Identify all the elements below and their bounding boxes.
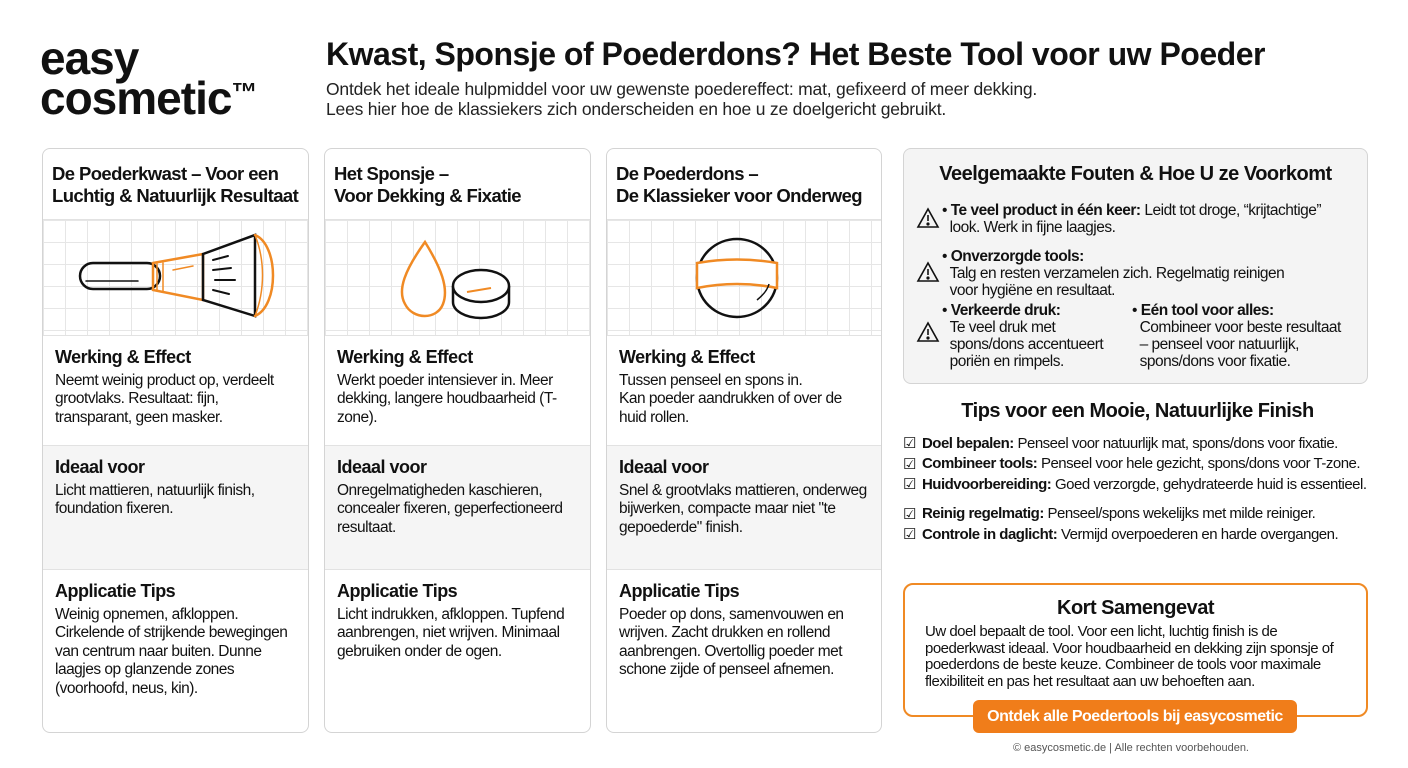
logo: easy — [40, 32, 138, 84]
panel: poederdons — [606, 148, 882, 733]
section: ideaal: Ideaal voor — [337, 457, 427, 477]
section: werking: Werking & Effect — [55, 347, 191, 367]
section: tips: Licht indrukken, afkloppen. Tupfend aanbrengen, niet wrijven. Minimaal gebruiken onder de ogen. — [337, 606, 564, 660]
icon: sponge — [325, 219, 590, 336]
section: tips: Applicatie Tips — [55, 581, 175, 601]
panel: samenvatting — [903, 583, 1368, 717]
tips list: ☑ — [903, 506, 916, 523]
tips list: ☑ — [903, 435, 916, 452]
item 1 — [942, 202, 1321, 236]
icon: warning 2 — [916, 262, 940, 282]
section: werking: Werkt poeder intensiever in. Meer dekking, langere houdbaarheid (T-zone). — [337, 372, 557, 426]
logo: cosmetic™ — [40, 72, 256, 124]
section: ideaal: Onregelmatigheden kaschieren, concealer fixeren, geperfectioneerd resultaat. — [337, 482, 562, 536]
section: tips: Applicatie Tips — [619, 581, 739, 601]
heading: De Poederkwast – Voor een Luchtig & Natuurlijk Resultaat — [52, 163, 298, 206]
section: tips: Poeder op dons, samenvouwen en wrijven. Zacht drukken en rollend aanbrengen. Overtollig poeder met schone zijde of penseel afnemen. — [619, 606, 844, 678]
item 4: spons/dons voor fixatie. — [1140, 353, 1290, 370]
panel: fouten — [903, 148, 1368, 384]
section: ideaal — [607, 446, 881, 570]
item 3 — [942, 302, 1104, 370]
item 1: • Te veel product in één keer: Leidt tot droge, “krijtachtige” — [942, 202, 1321, 219]
text: Uw doel bepaalt de tool. Voor een licht, luchtig finish is de poederkwast ideaal. Voor houdbaarheid en dekking zijn sponsje of poederdons de beste keuze. Combineer de tools voor maximale flexibiliteit en pas het resultaat aan uw behoeften aan. — [925, 623, 1333, 690]
heading: Tips voor een Mooie, Natuurlijke Finish — [961, 400, 1314, 422]
section: tips — [337, 581, 564, 660]
heading: Het Sponsje – — [334, 163, 449, 184]
subtitle: Ontdek het ideale hulpmiddel voor uw gewenste poedereffect: mat, gefixeerd of meer dekking. — [326, 79, 1037, 99]
icon: warning 3 — [916, 322, 940, 342]
heading: Kort Samengevat — [1057, 597, 1214, 619]
heading: Voor Dekking & Fixatie — [334, 185, 521, 206]
section: werking: Werking & Effect — [619, 347, 755, 367]
heading — [616, 163, 862, 206]
heading: De Poederdons – — [616, 163, 758, 184]
tips list: Huidvoorbereiding: Goed verzorgde, gehydrateerde huid is essentieel. — [922, 476, 1367, 493]
item 4 — [1132, 302, 1342, 370]
section: werking: Werking & Effect — [337, 347, 473, 367]
tips list: Doel bepalen: Penseel voor natuurlijk mat, spons/dons voor fixatie. — [922, 435, 1338, 452]
item 4: – penseel voor natuurlijk, — [1140, 336, 1299, 353]
item 3: • Verkeerde druk: — [942, 302, 1060, 319]
item 1: look. Werk in fijne laagjes. — [950, 219, 1115, 236]
tips list: ☑ — [903, 476, 916, 493]
item 3: poriën en rimpels. — [950, 353, 1064, 370]
heading: Veelgemaakte Fouten & Hoe U ze Voorkomt — [939, 163, 1332, 185]
section: ideaal: Ideaal voor — [55, 457, 145, 477]
item 2: Talg en resten verzamelen zich. Regelmatig reinigen — [950, 265, 1284, 282]
tips list: ☑ — [903, 456, 916, 473]
section: ideaal: Snel & grootvlaks mattieren, onderweg bijwerken, compacte maar niet "te gepoederde" finish. — [619, 482, 867, 536]
subtitle: Lees hier hoe de klassiekers zich onderscheiden en hoe u ze doelgericht gebruikt. — [326, 99, 946, 119]
section: werking — [607, 336, 881, 446]
icon: warning 1 — [916, 208, 940, 228]
section: ideaal: Licht mattieren, natuurlijk finish, foundation fixeren. — [55, 482, 255, 517]
section: ideaal — [325, 446, 590, 570]
section: werking: Tussen penseel en spons in. — [619, 372, 802, 388]
heading — [334, 163, 521, 206]
section: tips: Applicatie Tips — [337, 581, 457, 601]
icon: puff — [607, 219, 881, 336]
section: werking — [43, 336, 308, 446]
tips list: Controle in daglicht: Vermijd overpoederen en harde overgangen. — [922, 526, 1338, 543]
item 4: • Eén tool voor alles: — [1132, 302, 1274, 319]
item 3: Te veel druk met — [950, 319, 1055, 336]
panel: poederkwast — [42, 148, 309, 733]
footer: © easycosmetic.de | Alle rechten voorbehouden. — [1013, 742, 1249, 754]
section: werking: Neemt weinig product op, verdeelt grootvlaks. Resultaat: fijn, transparant, geen masker. — [55, 372, 274, 426]
item 2: voor hygiëne en resultaat. — [950, 282, 1115, 299]
section: tips: Weinig opnemen, afkloppen. Cirkelende of strijkende bewegin­gen van centrum naar buiten. Dunne laagjes op glanzende zones (voorhoofd, neus, kin). — [55, 606, 287, 696]
title: Kwast, Sponsje of Poederdons? Het Beste Tool voor uw Poeder — [326, 36, 1265, 72]
panel: sponsje — [324, 148, 591, 733]
tips list: Combineer tools: Penseel voor hele gezicht, spons/dons voor T-zone. — [922, 455, 1360, 472]
heading: De Klassieker voor Onderweg — [616, 185, 862, 206]
panel: tips — [903, 400, 1367, 543]
icon: brush — [43, 219, 308, 336]
item 3: spons/dons accentueert — [950, 336, 1103, 353]
subtitle — [326, 79, 1037, 119]
section: werking — [325, 336, 590, 446]
item 2: • Onverzorgde tools: — [942, 248, 1084, 265]
tips list: Reinig regelmatig: Penseel/spons wekelijks met milde reiniger. — [922, 505, 1315, 522]
logo — [40, 32, 256, 124]
item 4: Combineer voor beste resultaat — [1140, 319, 1341, 336]
button — [973, 700, 1297, 733]
section: werking: Kan poeder aandrukken of over de huid rollen. — [619, 390, 842, 426]
section: ideaal — [43, 446, 308, 570]
button: Ontdek alle Poedertools bij easycosmetic — [987, 708, 1283, 725]
tips list — [903, 435, 1367, 543]
section: ideaal: Ideaal voor — [619, 457, 709, 477]
item 2 — [942, 248, 1284, 299]
tips list: ☑ — [903, 526, 916, 543]
